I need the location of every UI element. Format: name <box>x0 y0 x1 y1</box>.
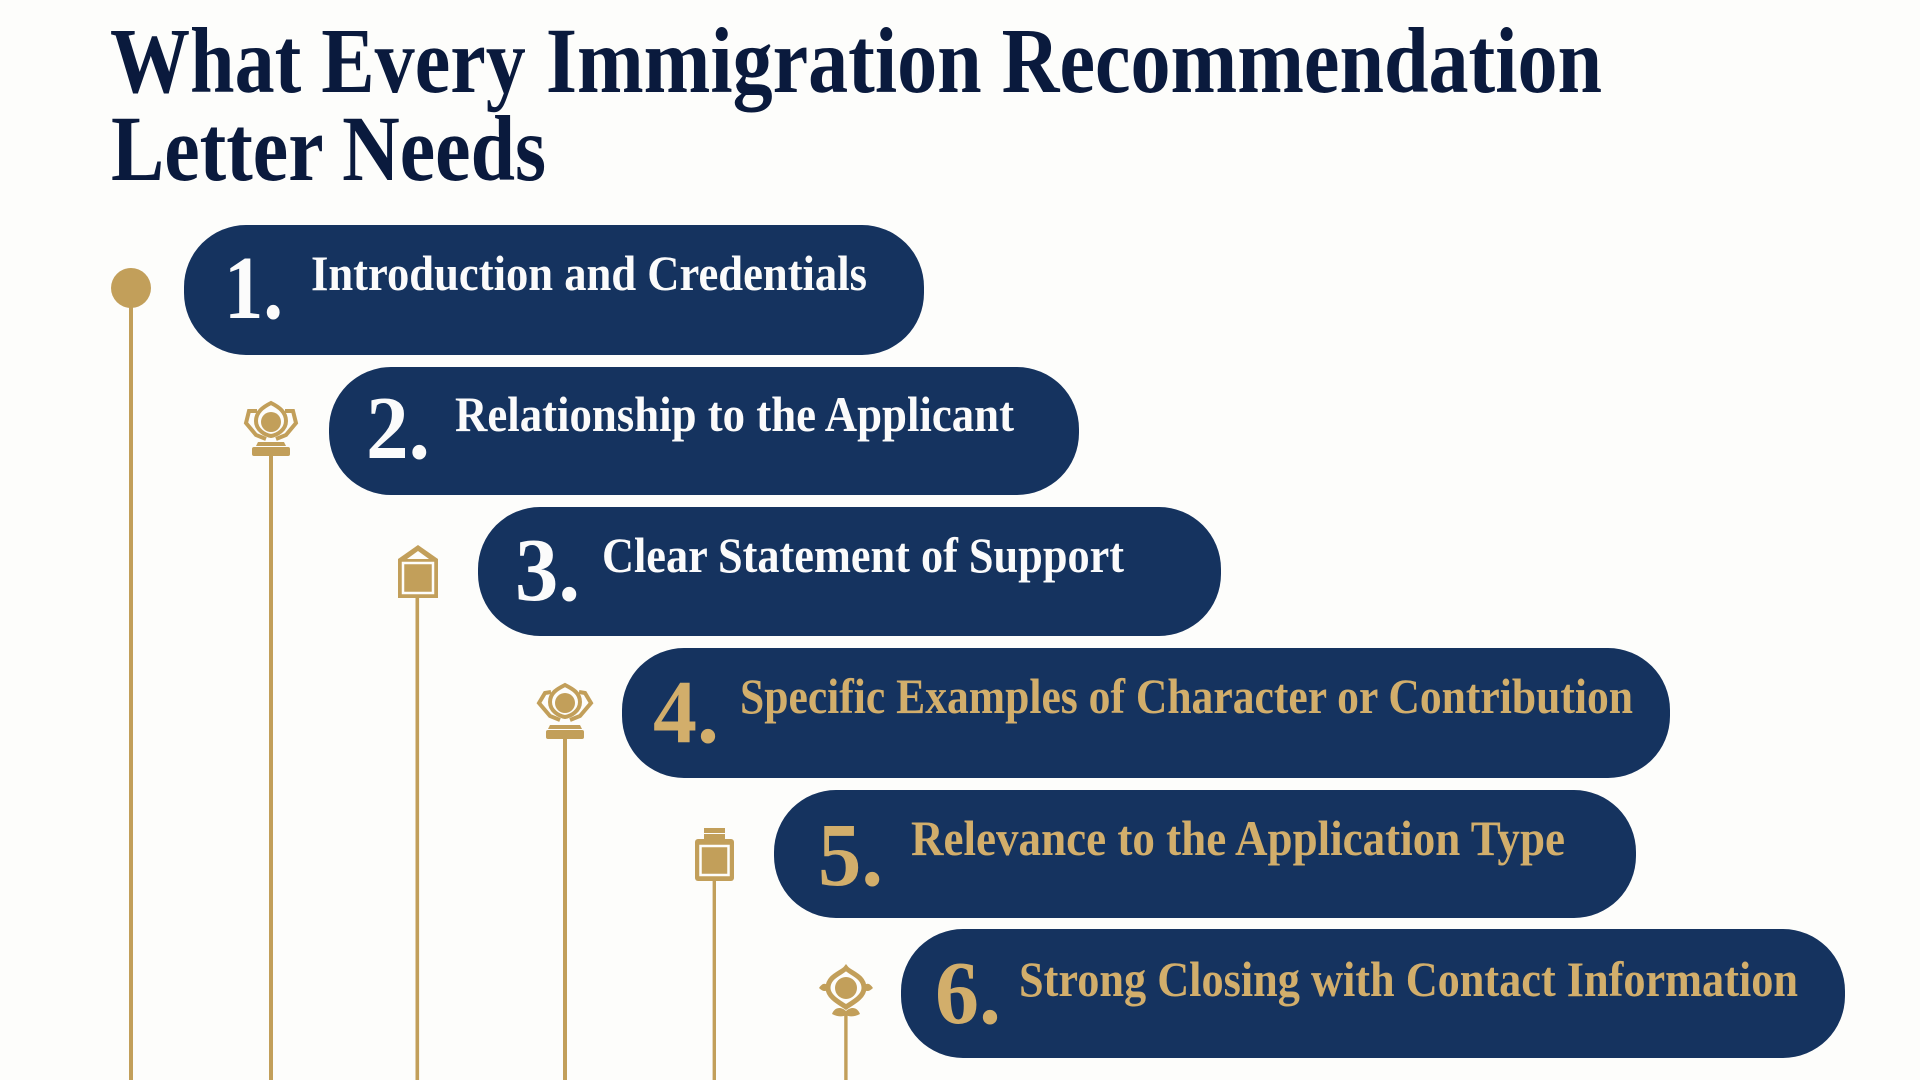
step 4 label: Specific Examples of Character or Contribution <box>740 668 1633 724</box>
step 6 number: 6. <box>935 944 1001 1043</box>
title <box>110 10 1602 201</box>
marker 4: lotus icon with stem <box>539 685 591 1080</box>
step 1 number: 1. <box>224 239 283 338</box>
step 6 pill <box>901 929 1845 1058</box>
title: Letter Needs <box>111 98 546 201</box>
step 5 number: 5. <box>818 806 883 905</box>
marker 3: box icon with stem <box>398 545 438 1080</box>
marker 5: jar icon with stem <box>695 828 734 1080</box>
step 2 label: Relationship to the Applicant <box>455 386 1014 442</box>
step 4 pill <box>622 648 1670 778</box>
step 2 number: 2. <box>366 379 430 478</box>
step 6 label: Strong Closing with Contact Information <box>1019 951 1798 1007</box>
step 1 label: Introduction and Credentials <box>311 245 867 301</box>
step 5 pill <box>774 790 1636 918</box>
step 5 label: Relevance to the Application Type <box>911 810 1565 866</box>
marker 6: teardrop flower icon with stem <box>819 968 873 1080</box>
marker 2: lotus icon with stem <box>246 403 296 1080</box>
marker 1: gold dot with stem <box>111 268 151 1080</box>
step 4 number: 4. <box>653 663 719 762</box>
step 2 pill <box>329 367 1079 495</box>
step 3 pill <box>478 507 1221 636</box>
step 3 label: Clear Statement of Support <box>602 527 1124 583</box>
title: What Every Immigration Recommendation <box>110 10 1602 113</box>
step 3 number: 3. <box>515 521 580 620</box>
step 1 pill <box>184 225 924 355</box>
